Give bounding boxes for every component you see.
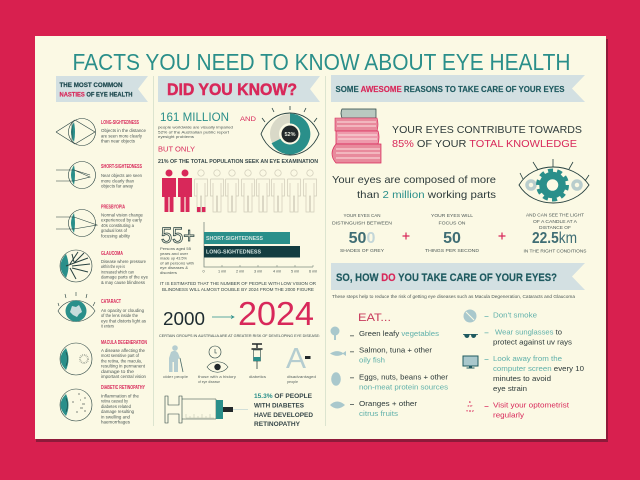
stat: 22.5km candle — [524, 213, 586, 254]
stat: 2000 to 2024: 2000 — [163, 309, 205, 329]
item: fish: oily fish — [359, 356, 385, 365]
labels: risk groups: older people — [163, 375, 188, 379]
item: cataract: it enters — [101, 324, 114, 329]
item: computer screen: minutes to avoid — [493, 374, 551, 383]
item: oranges: citrus fruits — [359, 409, 398, 418]
item: optometrist — [484, 401, 569, 420]
item: macula degeneration — [101, 340, 147, 379]
item: eggs — [350, 372, 449, 391]
ribbon heading: nasties: THE MOST COMMON — [60, 82, 123, 89]
item: diabetic retinopathy: DIABETIC RETINOPATHY — [101, 385, 145, 391]
stat: 55+: of all persons with — [160, 261, 194, 265]
item: diabetic retinopathy: in swelling and — [101, 414, 131, 419]
bar chart: sightedness: 0 — [202, 270, 205, 274]
ribbon heading: take care — [331, 263, 585, 290]
icon: plus — [402, 232, 410, 240]
stat: 161 million: BUT ONLY — [158, 147, 195, 154]
item: glaucoma: increased which can — [101, 269, 135, 274]
item: optometrist: regularly — [493, 411, 524, 420]
labels: risk groups: people — [287, 380, 298, 384]
item: optometrist: Visit your optometrist — [493, 401, 569, 410]
text: certain groups: CERTAIN GROUPS IN AUSTRALIA ARE AT GREATER RISK OF DEVELOPING EYE DISEASE: — [159, 333, 320, 338]
item: glaucoma: & may cause blindness — [101, 280, 145, 285]
item: computer screen: computer screen every 10 — [493, 364, 584, 373]
icon: eye chart: E — [469, 400, 471, 404]
ribbon heading: did you know — [158, 76, 320, 102]
item: presbyopia: gradual loss of — [101, 228, 128, 233]
ribbon heading: awesome reasons — [331, 75, 585, 102]
item: short-sightedness: Near objects are seen — [101, 173, 143, 178]
text: low vision estimate: IT IS ESTIMATED THAT THE NUMBER OF PEOPLE WITH LOW VISION OR — [160, 281, 317, 287]
item: diabetic retinopathy: diabetes related — [101, 404, 132, 409]
item: cataract: An opacity or clouding — [101, 308, 145, 313]
icon: stack of books — [332, 109, 381, 163]
bar chart: sightedness: 1 mil — [218, 270, 226, 274]
panel: nasties of eye health — [56, 76, 149, 424]
stat: 500 shades — [332, 213, 392, 253]
chart: eye donut 52%: 52% — [284, 132, 296, 138]
item: short-sightedness: SHORT-SIGHTEDNESS — [101, 164, 142, 170]
item: oranges — [350, 399, 418, 418]
bar chart: sightedness: LONG-SIGHTEDNESS — [206, 250, 262, 256]
item: long-sightedness — [101, 120, 147, 144]
panel: did you know — [158, 76, 320, 428]
icon: older people — [169, 345, 183, 372]
item: computer screen: Look away from the — [493, 354, 562, 363]
pictogram: ten people — [162, 170, 316, 212]
stat: 500 shades: 500 — [349, 230, 375, 247]
item: presbyopia — [101, 205, 144, 238]
item: diabetic retinopathy: damage resulting — [101, 409, 135, 414]
stat: 55+: Persons aged 55 — [160, 247, 191, 251]
item: sunglasses — [484, 327, 572, 346]
bar chart: sightedness — [202, 222, 317, 274]
item: eggs: Eggs, nuts, beans + other — [359, 372, 449, 381]
item: short-sightedness: objects far away — [101, 184, 134, 189]
icon: eye chart: F P — [468, 404, 472, 408]
icon: sunglasses — [463, 334, 478, 338]
heading: eat: EAT... — [358, 312, 391, 324]
card background — [35, 36, 608, 442]
text: low vision estimate: BLINDNESS WILL ALMOST DOUBLE BY 2024 FROM THE 2000 FIGURE — [162, 287, 314, 293]
item: long-sightedness: are seen more clearly — [101, 133, 143, 138]
item: short-sightedness: more clearly than — [101, 178, 135, 183]
item: vegetables: Green leafy vegetables — [359, 329, 439, 338]
stat: 55+: eye diseases & — [160, 266, 189, 270]
icon: egg — [331, 372, 341, 386]
item: glaucoma: Disease where pressure — [101, 259, 147, 264]
text: 2 million working parts: than 2 million working parts — [357, 189, 496, 201]
item: cataract: CATARACT — [101, 299, 121, 305]
panel: how to take care — [330, 263, 585, 420]
item: cataract: eye that distorts light as — [101, 318, 146, 323]
stat: 161 million: 52% of the Australian public report — [158, 130, 229, 134]
bar chart: sightedness: 2 mil — [236, 270, 244, 274]
labels: risk groups — [163, 375, 316, 384]
item: computer screen: eye strain — [493, 384, 527, 393]
stat: 2000 to 2024: 2024 — [238, 295, 314, 332]
stat: 50 things: THINGS PER SECOND — [425, 248, 480, 253]
icon: monitor — [463, 356, 478, 368]
stat: 161 million: people worldwide are visually impaired — [158, 126, 233, 130]
text: 2 million working parts: Your eyes are composed of more — [332, 174, 496, 186]
icon: macula eye — [60, 343, 92, 375]
item: glaucoma: GLAUCOMA — [101, 251, 123, 257]
column divider: right — [324, 76, 327, 426]
item: sunglasses: Wear sunglasses to — [495, 327, 562, 336]
title: FACTS YOU NEED TO KNOW ABOUT EYE HEALTH — [72, 49, 570, 75]
stat: 50 things: FOCUS ON — [438, 220, 466, 226]
text: low vision estimate — [160, 281, 317, 293]
stat: 22.5km candle: 22.5km — [532, 230, 577, 247]
item: diabetic retinopathy: Inflammation of the — [101, 394, 140, 398]
stat: 55+: made up 43.5% — [160, 257, 188, 261]
ribbon heading: nasties — [56, 76, 148, 102]
item: don't smoke: Don't smoke — [493, 311, 537, 320]
text: 85% of knowledge — [392, 124, 582, 150]
panel: awesome reasons — [331, 75, 589, 254]
stat: 55+: 55+ — [161, 223, 195, 248]
item: presbyopia: Normal vision change — [101, 212, 144, 218]
icon: eye with gears — [519, 159, 589, 203]
stat: diabetes retinopathy: HAVE DEVELOPED — [254, 412, 313, 419]
text: intro: These steps help to reduce the risk of getting eye diseases such as Macula Degeneration, Cataracts and Glaucoma — [332, 294, 576, 299]
item: macula degeneration: A disease affecting the — [101, 348, 146, 353]
stat: diabetes retinopathy: RETINOPATHY — [254, 421, 300, 428]
item: presbyopia: 40s constituting a — [101, 223, 135, 228]
stat: diabetes retinopathy: WITH DIABETES — [254, 402, 304, 410]
column divider: left — [152, 76, 155, 426]
item: cataract — [101, 299, 146, 329]
icon: clock and eye — [207, 346, 228, 372]
icon: long-sightedness eye — [56, 118, 96, 146]
item: computer screen — [484, 354, 584, 393]
stat: 55+ — [160, 223, 195, 275]
stat: diabetes retinopathy: 15.3% OF PEOPLE — [254, 393, 312, 400]
icon: diabetic retinopathy eye — [60, 389, 92, 421]
icon: fish — [330, 351, 346, 356]
stat: 161 million: eyesight problems — [158, 135, 194, 139]
item: presbyopia: experienced by early — [101, 218, 143, 223]
bar chart: sightedness: 3 mil — [254, 270, 262, 274]
stat: 22.5km candle: IN THE RIGHT CONDITIONS — [524, 249, 586, 254]
item: macula degeneration: important central vision — [101, 374, 147, 379]
text: 85% of knowledge: YOUR EYES CONTRIBUTE TOWARDS — [392, 124, 582, 136]
stat: 161 million — [158, 110, 256, 154]
stat: 55+: disorders — [160, 271, 177, 275]
stat: 161 million: 161 MILLION — [160, 110, 229, 124]
stat: 2000 to 2024 — [163, 295, 314, 332]
item: macula degeneration: resulting in permanent — [101, 364, 146, 369]
ribbon heading: nasties: NASTIES OF EYE HEALTH — [60, 92, 133, 98]
item: short-sightedness — [101, 164, 143, 189]
item: macula degeneration: MACULA DEGENERATION — [101, 340, 147, 346]
labels: risk groups: disadvantaged — [287, 375, 316, 379]
icon: tree vegetable — [330, 326, 340, 340]
stat: 50 things: YOUR EYES WILL — [431, 213, 473, 218]
text: 21% of population: 21% OF THE TOTAL POPULATION SEEK AN EYE EXAMINATION — [158, 159, 318, 165]
bar chart: sightedness: 4 mil — [273, 270, 281, 274]
chart: eye donut 52% — [261, 106, 319, 155]
labels: risk groups: of eye disease — [198, 380, 220, 384]
labels: risk groups: those with a history — [198, 375, 236, 379]
item: oranges: Oranges + other — [359, 399, 418, 408]
item: fish — [350, 346, 433, 365]
item: macula degeneration: the retina, the macula, — [101, 358, 142, 363]
item: macula degeneration: damage to the — [101, 369, 135, 374]
icon: small syringe — [252, 344, 262, 369]
stat: diabetes retinopathy — [254, 393, 313, 428]
stat: 50 things — [425, 213, 480, 253]
icon: A minus: A — [286, 343, 307, 375]
item: eggs: non-meat protein sources — [359, 382, 448, 391]
text: 2 million working parts — [332, 174, 496, 201]
item: diabetic retinopathy — [101, 385, 145, 424]
stat: 500 shades: YOUR EYES CAN — [344, 213, 380, 218]
icon: large syringe — [165, 396, 248, 423]
item: cataract: of the lens inside the — [101, 313, 139, 318]
labels: risk groups: diabetics — [249, 375, 266, 379]
text: 85% of knowledge: 85% OF YOUR TOTAL KNOWLEDGE — [392, 138, 577, 150]
icon: eye chart: T O Z — [466, 409, 474, 413]
stat: 500 shades: DISTINGUISH BETWEEN — [332, 220, 392, 226]
stat: 22.5km candle: OF A CANDLE AT A — [533, 219, 578, 224]
ribbon heading: awesome reasons: SOME AWESOME REASONS TO TAKE CARE OF YOUR EYES — [336, 85, 565, 94]
ribbon heading: did you know: DID YOU KNOW? — [167, 80, 297, 99]
ribbon heading: take care: SO, HOW DO YOU TAKE CARE OF YOUR EYES? — [336, 272, 557, 284]
bar chart: sightedness: 5 mil — [291, 270, 299, 274]
icon: cataract eye — [58, 292, 95, 322]
stat: 500 shades: SHADES OF GREY — [340, 248, 384, 253]
bar chart: sightedness: SHORT-SIGHTEDNESS — [206, 236, 264, 242]
stat: 50 things: 50 — [443, 230, 461, 247]
item: macula degeneration: most sensitive part of — [101, 353, 140, 358]
item: long-sightedness: LONG-SIGHTEDNESS — [101, 120, 139, 126]
item: diabetic retinopathy: haemorrhages — [101, 420, 130, 424]
item: glaucoma — [101, 251, 149, 285]
item: glaucoma: within the eye is — [101, 264, 125, 269]
stat: 22.5km candle: AND CAN SEE THE LIGHT — [526, 213, 584, 218]
icon: orange — [330, 402, 345, 408]
item: long-sightedness: than near objects — [101, 139, 135, 144]
item: presbyopia: focusing ability — [101, 233, 131, 238]
stat: 161 million: AND — [240, 116, 256, 123]
icon: glaucoma eye — [60, 250, 92, 282]
item: presbyopia: PRESBYOPIA — [101, 205, 125, 211]
stat: 22.5km candle: DISTANCE OF — [539, 225, 571, 230]
icon: short-sightedness eye — [56, 162, 96, 188]
icon: no smoking — [464, 310, 476, 322]
stat: 55+: years and over — [160, 252, 189, 256]
bar chart: sightedness: 6 mil — [309, 270, 317, 274]
icon: presbyopia eye — [56, 210, 97, 236]
item: sunglasses: protect against uv rays — [493, 337, 572, 346]
item: fish: Salmon, tuna + other — [359, 346, 433, 355]
item: long-sightedness: Objects in the distance — [101, 128, 147, 133]
item: diabetic retinopathy: retina caused by — [101, 399, 129, 404]
item: glaucoma: damage parts of the eye — [101, 275, 149, 280]
icon: plus — [498, 232, 506, 240]
icon: eye chart — [466, 400, 474, 413]
